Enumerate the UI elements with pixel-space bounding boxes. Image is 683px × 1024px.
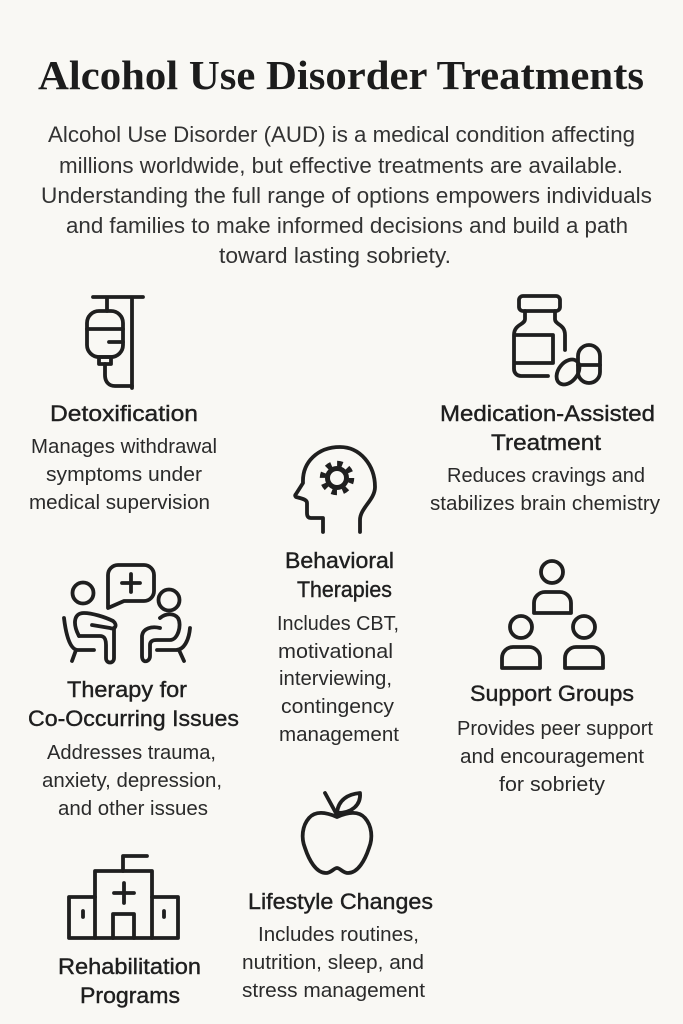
text: detoxification description [29, 436, 217, 514]
intro text [41, 122, 652, 268]
intro text: millions worldwide, but effective treatments are available. [59, 153, 623, 178]
icon: apple [303, 793, 371, 873]
text: lifestyle description: stress management [242, 980, 425, 1002]
heading: behavioral therapies: Therapies [297, 577, 392, 602]
text: behavioral description: interviewing, [279, 668, 392, 690]
text: behavioral description: motivational [278, 641, 393, 663]
heading: support groups: Support Groups [470, 681, 634, 706]
heading: lifestyle changes: Lifestyle Changes [248, 889, 433, 914]
heading: rehabilitation programs [58, 954, 201, 1008]
panel: behavioral therapies [277, 447, 399, 746]
text: behavioral description [277, 613, 399, 746]
panel: rehabilitation programs [58, 856, 201, 1008]
text: behavioral description: contingency [281, 696, 394, 718]
text: medication description: Reduces cravings and [447, 465, 645, 487]
panel: medication-assisted treatment [430, 296, 660, 515]
heading: therapy for co-occurring issues [28, 677, 239, 731]
text: detoxification description: symptoms under [46, 464, 202, 486]
icon: therapist and client [64, 565, 190, 662]
text: therapy description: and other issues [58, 798, 208, 820]
panel: support groups [457, 561, 653, 796]
panel: therapy for co-occurring issues [28, 565, 239, 820]
icon: group of people [502, 561, 603, 668]
text: lifestyle description [242, 924, 425, 1002]
text: lifestyle description: Includes routines, [258, 924, 419, 946]
icon: IV drip [87, 297, 143, 388]
heading: rehabilitation programs: Rehabilitation [58, 954, 201, 979]
text: support groups description: Provides peer support [457, 718, 653, 740]
text: therapy description: Addresses trauma, [47, 742, 216, 764]
text: lifestyle description: nutrition, sleep, and [242, 952, 424, 974]
text: detoxification description: medical supervision [29, 492, 210, 514]
text: support groups description [457, 718, 653, 796]
text: medication description: stabilizes brain chemistry [430, 493, 660, 515]
heading: behavioral therapies [285, 548, 394, 602]
intro text: Understanding the full range of options empowers individuals [41, 183, 652, 208]
icon: head with gear [295, 447, 375, 532]
text: medication description [430, 465, 660, 515]
text: support groups description: and encouragement [460, 746, 644, 768]
heading: detoxification: Detoxification [50, 401, 198, 426]
text: detoxification description: Manages withdrawal [31, 436, 217, 458]
icon: pill bottle and pills [514, 296, 600, 389]
heading: behavioral therapies: Behavioral [285, 548, 394, 573]
heading: medication-assisted treatment: Medication-Assisted [440, 401, 655, 426]
heading: therapy for co-occurring issues: Therapy for [67, 677, 187, 702]
heading: rehabilitation programs: Programs [80, 983, 180, 1008]
intro text: Alcohol Use Disorder (AUD) is a medical condition affecting [48, 122, 635, 147]
heading: therapy for co-occurring issues: Co-Occurring Issues [28, 706, 239, 731]
panel: detoxification [29, 297, 217, 514]
text: support groups description: for sobriety [499, 774, 605, 796]
heading: medication-assisted treatment: Treatment [491, 430, 601, 455]
icon: hospital [69, 856, 178, 938]
title: Alcohol Use Disorder Treatments [38, 52, 644, 98]
heading: medication-assisted treatment [440, 401, 655, 455]
intro text: toward lasting sobriety. [219, 243, 451, 268]
text: therapy description [42, 742, 222, 820]
text: therapy description: anxiety, depression, [42, 770, 222, 792]
text: behavioral description: management [279, 724, 399, 746]
panel: lifestyle changes [242, 793, 433, 1002]
intro text: and families to make informed decisions and build a path [66, 213, 628, 238]
text: behavioral description: Includes CBT, [277, 613, 399, 635]
